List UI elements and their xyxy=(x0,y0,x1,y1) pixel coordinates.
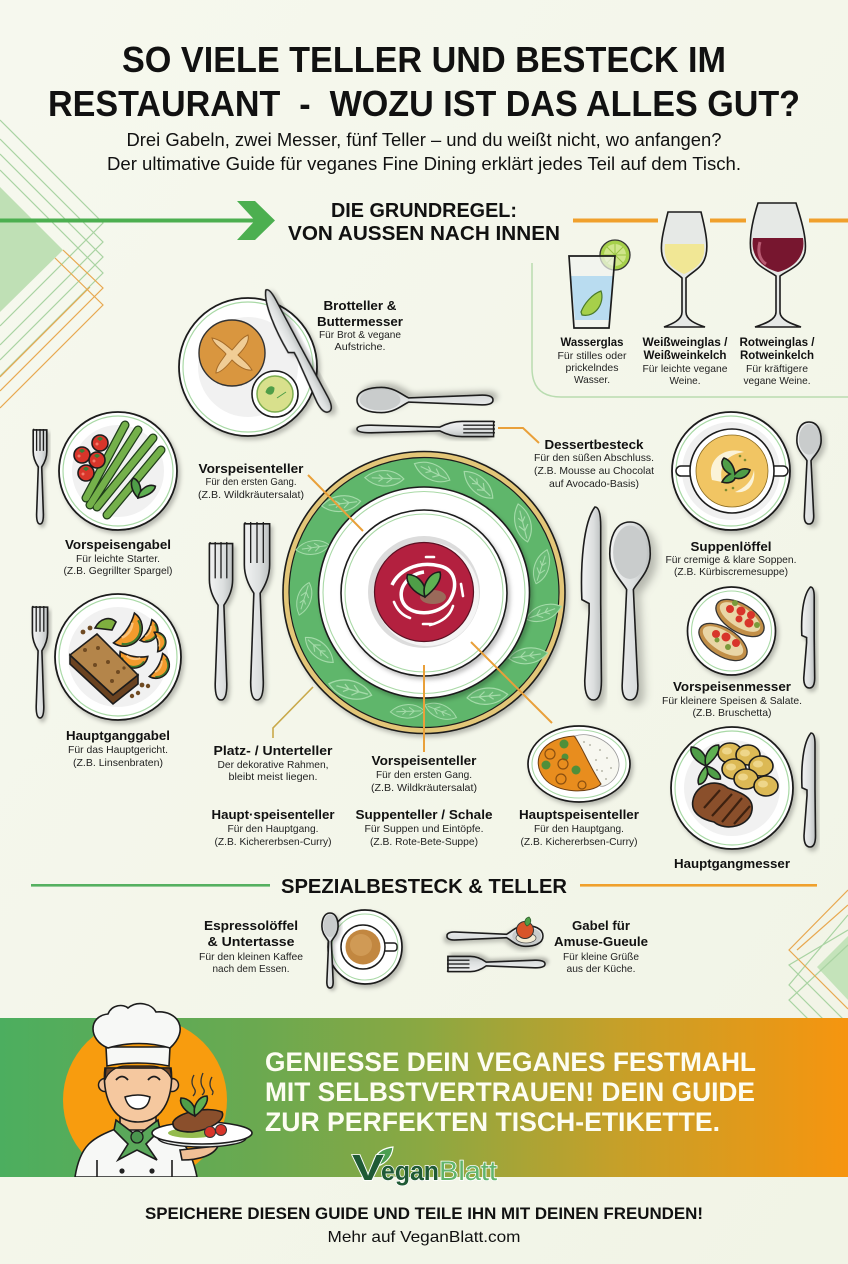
label: platz und unterteller: bleibt meist liegen. xyxy=(228,771,318,783)
icon: espresso spoon xyxy=(322,913,338,988)
banner headline: MIT SELBSTVERTRAUEN! DEIN GUIDE xyxy=(265,1077,755,1107)
label: vorspeisenteller center: (Z.B. Wildkräutersalat) xyxy=(371,782,477,794)
label: brotteller: Für Brot & vegane xyxy=(319,329,401,341)
label: dessertbesteck: Für den süßen Abschluss. xyxy=(534,452,654,464)
banner headline: ZUR PERFEKTEN TISCH-ETIKETTE. xyxy=(265,1107,720,1137)
label: hauptganggabel: (Z.B. Linsenbraten) xyxy=(73,757,163,769)
label: hauptganggabel: Für das Hauptgericht. xyxy=(68,744,168,756)
banner headline: GENIESSE DEIN VEGANES FESTMAHL xyxy=(265,1047,756,1077)
label: espressoloeffel: Espressolöffel xyxy=(204,918,298,933)
label: gabel fuer amuse-gueule: Amuse-Gueule xyxy=(554,934,648,949)
label: weissweinglas xyxy=(642,335,728,387)
icon: water glass xyxy=(569,240,630,328)
label: vorspeisenteller left: Für den ersten Gang. xyxy=(206,476,296,488)
label: gabel fuer amuse-gueule: aus der Küche. xyxy=(566,963,636,975)
leader: dessertbesteck xyxy=(498,428,539,443)
label: hauptgangmesser: Hauptgangmesser xyxy=(674,856,790,871)
label: gabel fuer amuse-gueule xyxy=(554,918,648,975)
label: rotweinglas xyxy=(740,335,815,387)
label: brotteller: Aufstriche. xyxy=(334,341,386,353)
leader: suppenteller xyxy=(423,665,425,752)
label: vorspeisengabel: (Z.B. Gegrillter Spargel) xyxy=(64,565,172,577)
label: suppenloeffel: Für cremige & klare Soppen. xyxy=(666,554,796,566)
label: platz und unterteller: Der dekorative Rahmen, xyxy=(218,759,328,771)
label: vorspeisengabel: Für leichte Starter. xyxy=(76,553,160,565)
label: hauptspeisenteller left: Haupt·speisenteller xyxy=(212,807,334,822)
label: wasserglas: prickelndes xyxy=(566,362,618,374)
panel: glasses frame xyxy=(532,263,848,397)
logo: veganblatt: Blatt xyxy=(439,1156,498,1186)
footer text: Mehr auf VeganBlatt.com xyxy=(328,1229,520,1246)
heading: die grundregel: DIE GRUNDREGEL: xyxy=(331,199,517,222)
label: vorspeisengabel xyxy=(64,537,172,577)
logo: veganblatt: egan xyxy=(381,1156,439,1186)
label: weissweinglas: Für leichte vegane xyxy=(642,363,728,375)
heading: die grundregel xyxy=(288,199,560,245)
label: rotweinglas: vegane Weine. xyxy=(744,375,810,387)
label: hauptspeisenteller right: (Z.B. Kichererbsen-Curry) xyxy=(520,836,638,848)
label: hauptspeisenteller right: Hauptspeisenteller xyxy=(519,807,639,822)
leader: hauptspeisenteller xyxy=(471,642,552,723)
label: weissweinglas: Weißweinkelch xyxy=(644,348,726,362)
label: vorspeisengabel: Vorspeisengabel xyxy=(65,537,171,552)
subtitle: Drei Gabeln, zwei Messer, fünf Teller – und du weißt nicht, wo anfangen? xyxy=(126,130,722,150)
icon: curry plate xyxy=(528,726,630,802)
label: suppenteller xyxy=(356,807,492,848)
label: espressoloeffel: nach dem Essen. xyxy=(212,963,290,975)
title xyxy=(48,39,800,124)
label: vorspeisenmesser: (Z.B. Bruschetta) xyxy=(692,707,772,719)
icon: amuse-gueule spoon xyxy=(447,917,543,946)
logo: veganblatt: V xyxy=(352,1147,384,1188)
logo: veganblatt xyxy=(352,1147,498,1188)
icon: steak plate xyxy=(671,727,793,849)
panel: banner xyxy=(0,1018,848,1177)
arrow: outside to inside xyxy=(0,201,275,240)
label: vorspeisenteller center xyxy=(371,753,477,794)
decoration: top-left chevrons xyxy=(0,120,103,408)
subtitle: Der ultimative Guide für veganes Fine Dining erklärt jedes Teil auf dem Tisch. xyxy=(107,154,741,174)
icon: dessert spoon xyxy=(357,387,493,413)
title: SO VIELE TELLER UND BESTECK IM xyxy=(122,39,726,80)
orange rule behind glasses xyxy=(573,218,848,222)
title: RESTAURANT - WOZU IST DAS ALLES GUT? xyxy=(48,83,800,124)
label: suppenloeffel: (Z.B. Kürbiscremesuppe) xyxy=(674,566,788,578)
label: dessertbesteck: (Z.B. Mousse au Chocolat xyxy=(534,465,654,477)
label: rotweinglas: Für kräftigere xyxy=(746,363,808,375)
icon: lentil roast plate xyxy=(55,594,181,720)
banner headline xyxy=(265,1047,756,1137)
label: hauptspeisenteller right: Für den Hauptgang. xyxy=(534,823,624,835)
icon: soup plate xyxy=(672,412,790,530)
label: brotteller xyxy=(317,298,403,353)
heading: spezialbesteck: SPEZIALBESTECK & TELLER xyxy=(281,876,568,898)
label: gabel fuer amuse-gueule: Gabel für xyxy=(572,918,630,933)
label: vorspeisenteller left: (Z.B. Wildkräutersalat) xyxy=(198,489,304,501)
label: hauptspeisenteller left: Für den Hauptgang. xyxy=(228,823,318,835)
label: vorspeisenteller center: Vorspeisenteller xyxy=(372,753,476,768)
label: vorspeisenteller left: Vorspeisenteller xyxy=(198,461,304,476)
leader: vorspeisenteller xyxy=(308,475,363,531)
label: wasserglas: Wasser. xyxy=(574,374,610,386)
label: wasserglas: Wasserglas xyxy=(560,335,624,349)
icon: main knife xyxy=(802,733,816,847)
label: hauptspeisenteller left xyxy=(212,807,334,848)
icon: main course fork xyxy=(32,606,48,718)
label: weissweinglas: Weine. xyxy=(670,375,700,387)
label: vorspeisenmesser: Für kleinere Speisen & Salate. xyxy=(662,695,802,707)
label: gabel fuer amuse-gueule: Für kleine Grüße xyxy=(563,951,639,963)
icon: starter fork xyxy=(33,429,47,524)
label: hauptspeisenteller left: (Z.B. Kichererbsen-Curry) xyxy=(214,836,332,848)
label: suppenteller: Für Suppen und Eintöpfe. xyxy=(364,823,484,835)
icon: espresso cup and saucer xyxy=(328,910,402,984)
label: suppenloeffel xyxy=(666,539,796,578)
label: suppenteller: Suppenteller / Schale xyxy=(356,807,492,822)
label: hauptspeisenteller right xyxy=(519,807,639,848)
label: dessertbesteck xyxy=(534,437,654,490)
label: wasserglas: Für stilles oder xyxy=(558,350,627,362)
label: platz und unterteller xyxy=(214,743,332,783)
label: wasserglas xyxy=(558,335,627,386)
label: brotteller: Buttermesser xyxy=(317,314,403,329)
label: espressoloeffel: Für den kleinen Kaffee xyxy=(199,951,303,963)
label: dessertbesteck: auf Avocado-Basis) xyxy=(549,478,639,490)
label: rotweinglas: Rotweinglas / xyxy=(740,335,815,349)
leader: platzteller xyxy=(273,687,313,738)
subtitle xyxy=(107,130,741,174)
label: weissweinglas: Weißweinglas / xyxy=(642,335,728,349)
icon: amuse-gueule fork xyxy=(447,956,545,972)
label: suppenloeffel: Suppenlöffel xyxy=(690,539,772,554)
label: dessertbesteck: Dessertbesteck xyxy=(544,437,644,452)
label: hauptganggabel: Hauptganggabel xyxy=(66,728,170,743)
icon: red wine glass xyxy=(750,203,805,327)
label: vorspeisenmesser: Vorspeisenmesser xyxy=(673,679,791,694)
icon: bread plate with butter knife xyxy=(179,288,334,436)
icon: bruschetta plate xyxy=(688,587,776,675)
label: vorspeisenteller left xyxy=(198,461,304,501)
label: suppenteller: (Z.B. Rote-Bete-Suppe) xyxy=(370,836,478,848)
icon: asparagus plate xyxy=(59,412,177,530)
icon: central place setting xyxy=(283,452,565,734)
label: hauptganggabel xyxy=(66,728,170,769)
icon: chef with plate xyxy=(63,1004,252,1182)
label: vorspeisenmesser xyxy=(662,679,802,719)
icon: large forks xyxy=(209,522,270,700)
footer text: SPEICHERE DIESEN GUIDE UND TEILE IHN MIT DEINEN FREUNDEN! xyxy=(145,1204,703,1223)
icon: large spoon xyxy=(610,522,650,700)
icon: large knife xyxy=(582,507,601,700)
footer text xyxy=(145,1204,703,1246)
heading: die grundregel: VON AUSSEN NACH INNEN xyxy=(288,222,560,245)
icon: white wine glass xyxy=(661,212,707,327)
label: vorspeisenteller center: Für den ersten Gang. xyxy=(376,769,472,781)
icon: starter knife xyxy=(802,587,815,688)
label: brotteller: Brotteller & xyxy=(324,298,396,313)
label: espressoloeffel xyxy=(199,918,303,975)
icon: soup spoon xyxy=(797,422,821,524)
decoration: bottom-right chevrons xyxy=(789,890,848,1026)
label: platz und unterteller: Platz- / Unterteller xyxy=(214,743,332,758)
icon: dessert fork xyxy=(357,421,495,437)
label: espressoloeffel: & Untertasse xyxy=(208,934,294,949)
label: rotweinglas: Rotweinkelch xyxy=(740,348,814,362)
